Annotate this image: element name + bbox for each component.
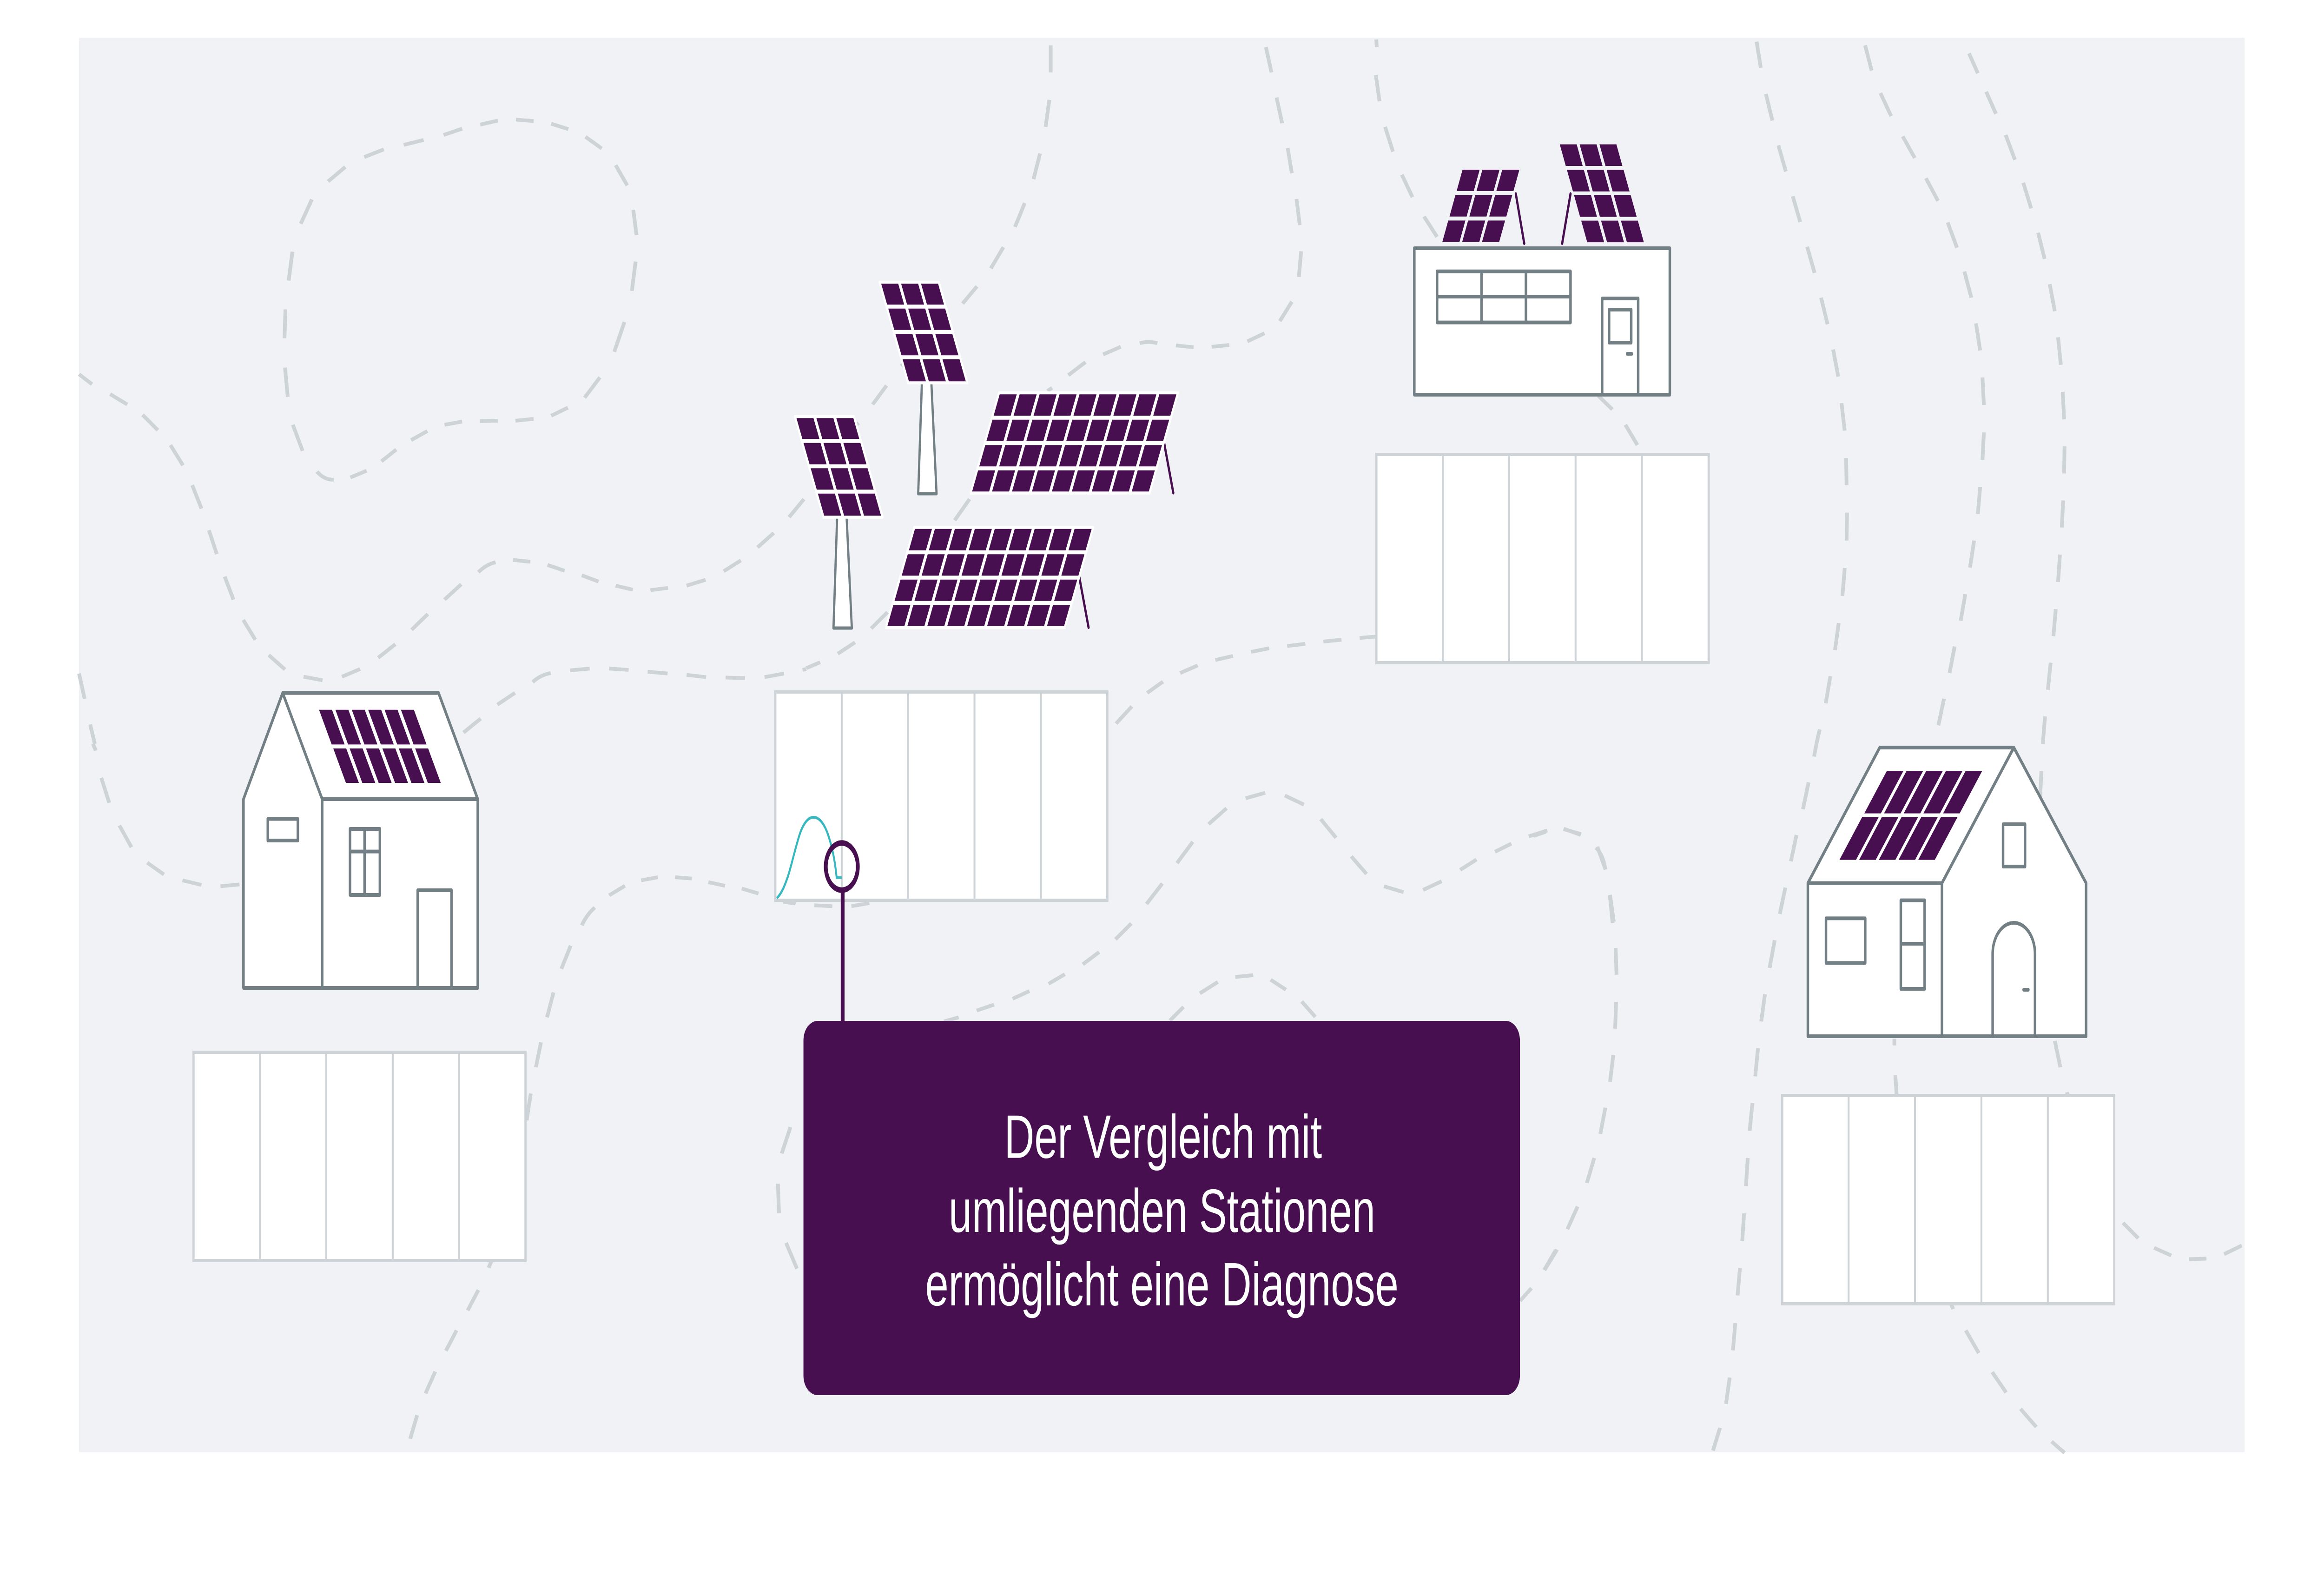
ground array upper <box>971 393 1178 493</box>
arched door <box>1993 923 2035 1036</box>
house body <box>1808 748 2086 1036</box>
rooftop panel left support <box>1516 194 1524 244</box>
door handle <box>2024 988 2028 992</box>
tall window <box>1901 900 1925 989</box>
station 4: house with roof panels <box>1808 748 2086 1036</box>
roof and wall lines <box>283 693 478 988</box>
door <box>1602 298 1638 395</box>
station 1: house with roof panels <box>244 693 478 988</box>
marker circle with leader line <box>826 843 858 1023</box>
door <box>418 890 451 988</box>
station 2: solar park <box>795 282 1178 628</box>
gable window <box>2003 824 2025 867</box>
ground array lower <box>886 527 1093 628</box>
tracker upper: pole and panel <box>880 282 967 494</box>
roof solar panels <box>1839 771 1982 860</box>
rooftop panel right support <box>1562 194 1571 244</box>
data grid: house 2 <box>1782 1095 2114 1304</box>
callout text: Der Vergleich mit <box>1004 1102 1322 1171</box>
rooftop panel left <box>1442 170 1519 242</box>
square window <box>1826 918 1865 963</box>
roof and wall lines <box>1808 748 2014 1036</box>
yield curve <box>777 817 842 898</box>
house body <box>244 693 478 988</box>
roof solar panels <box>319 710 441 783</box>
data grid: solar park with yield curve <box>775 692 1107 900</box>
callout text: ermöglicht eine Diagnose <box>925 1250 1399 1318</box>
building body <box>1414 248 1670 395</box>
door handle <box>1627 352 1632 356</box>
callout text <box>925 1102 1399 1318</box>
ribbon window <box>1437 271 1571 323</box>
main window <box>350 829 380 895</box>
tracker lower: pole and panel <box>795 417 883 628</box>
rooftop panel right <box>1560 144 1644 242</box>
small gable window <box>268 819 298 841</box>
callout box <box>804 1021 1520 1395</box>
callout text: umliegenden Stationen <box>949 1177 1375 1245</box>
door window <box>1609 310 1631 343</box>
data grid: commercial building <box>1376 455 1709 663</box>
data grid: house 1 <box>193 1053 526 1261</box>
station 3: commercial building with rooftop panels <box>1414 144 1670 395</box>
